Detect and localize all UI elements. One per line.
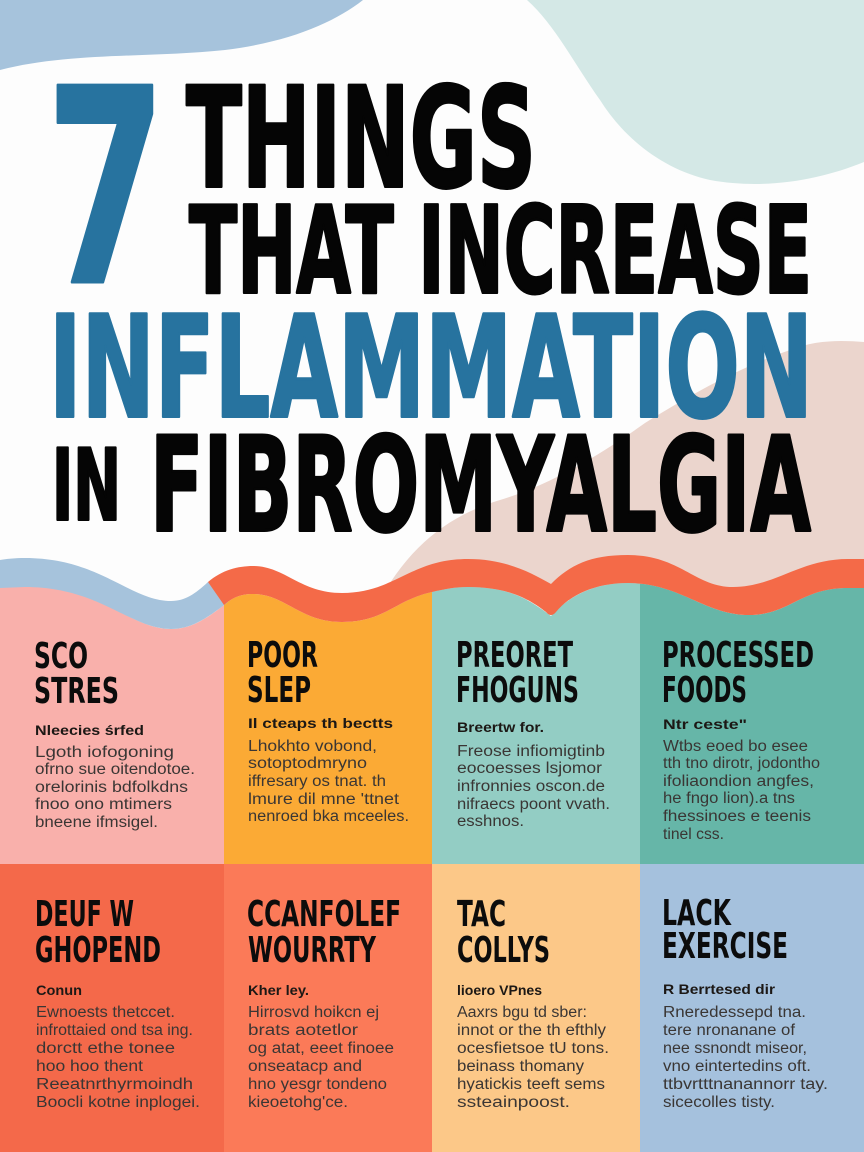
title line: THINGS: THINGS: [186, 58, 536, 220]
body text: nee ssnondt miseor,: [663, 1040, 807, 1057]
heading: CCANFOLEF: [247, 894, 401, 935]
heading: TAC: [457, 894, 506, 935]
body text: hyatickis teeft sems: [457, 1076, 605, 1093]
subheading: Il cteaps th bectts: [248, 715, 393, 731]
body text: beinass thomany: [457, 1058, 584, 1075]
body text: sicecolles tisty.: [663, 1094, 775, 1111]
body text: esshnos.: [457, 813, 524, 830]
body text: [457, 1004, 609, 1111]
body text: bneene ifmsigel.: [35, 814, 158, 831]
body text: Hirrosvd hoikcn ej: [248, 1004, 379, 1021]
body text: Reeatnrthyrmoindh: [36, 1076, 193, 1093]
body text: infronnies oscon.de: [457, 778, 605, 795]
body text: [36, 1004, 200, 1111]
heading: SCO: [34, 636, 88, 677]
body text: lmure dil mne 'ttnet: [248, 791, 400, 808]
panel: Lack Exercise: [640, 864, 864, 1152]
panel: Preoret Fhoguns: [432, 580, 640, 864]
heading: PREORET: [456, 635, 573, 676]
body text: hno yesgr tondeno: [248, 1076, 387, 1093]
subheading: Nleecies śrfed: [35, 722, 144, 738]
body text: [248, 738, 409, 825]
body text: [35, 744, 195, 831]
body text: infrottaied ond tsa ing.: [36, 1022, 193, 1039]
body text: orelorinis bdfolkdns: [35, 779, 188, 796]
body text: Rneredessepd tna.: [663, 1004, 806, 1021]
panel: Deuf W Ghopend: GHOPEND: [35, 930, 161, 971]
body text: Aaxrs bgu td sber:: [457, 1004, 587, 1021]
body text: ocesfietsoe tU tons.: [457, 1040, 609, 1057]
subheading: Kher ley.: [248, 982, 309, 998]
body text: tth tno dirotr, jodontho: [663, 755, 820, 772]
panel: Poor Slep: SLEP: [247, 670, 311, 711]
heading: DEUF W: [35, 894, 134, 935]
body text: fnoo ono mtimers: [35, 796, 172, 813]
heading: LACK: [662, 893, 732, 934]
subheading: Breertw for.: [457, 719, 544, 735]
body text: innot or the th efthly: [457, 1022, 606, 1039]
body text: tere nronanane of: [663, 1022, 796, 1039]
body text: [663, 738, 820, 843]
body text: [457, 743, 610, 830]
panel: Ccanfolef Wourrty: WOURRTY: [248, 930, 377, 971]
wave: blue band: [0, 558, 228, 629]
body text: ifoliaondion angfes,: [663, 773, 814, 790]
body text: dorctt ethe tonee: [36, 1040, 175, 1057]
body text: Lgoth iofogoning: [35, 744, 174, 761]
body text: Wtbs eoed bo esee: [663, 738, 808, 755]
body text: ttbvrtttnanannorr tay.: [663, 1076, 828, 1093]
body text: iffresary os tnat. th: [248, 773, 386, 790]
panel: Ccanfolef Wourrty: [224, 864, 432, 1152]
panel: Processed Foods: FOODS: [662, 670, 747, 711]
body text: he fngo lion).a tns: [663, 790, 795, 807]
panel: Lack Exercise: EXERCISE: [662, 926, 788, 967]
panel: Tac Collys: [432, 864, 640, 1152]
subheading: lioero VPnes: [457, 982, 542, 998]
title line: IN: IN: [52, 430, 121, 544]
wave: orange band: [208, 555, 864, 622]
body text: nifraecs poont vvath.: [457, 796, 610, 813]
subheading: Conun: [36, 982, 82, 998]
body text: Boocli kotne inplogei.: [36, 1094, 200, 1111]
body text: Ewnoests thetccet.: [36, 1004, 175, 1021]
body text: kieoetohg'ce.: [248, 1094, 348, 1111]
heading: POOR: [247, 635, 318, 676]
body text: fhessinoes e teenis: [663, 808, 811, 825]
body text: sotoptodmryno: [248, 755, 367, 772]
body text: hoo hoo thent: [36, 1058, 144, 1075]
subheading: R Berrtesed dir: [663, 981, 776, 997]
body text: onseatacp and: [248, 1058, 362, 1075]
background blob: right peach: [380, 341, 864, 600]
body text: Freose infiomigtinb: [457, 743, 605, 760]
background blob: top-right teal: [527, 0, 864, 184]
panel: Sco Stres: STRES: [34, 671, 119, 712]
background blob: top-left blue: [0, 0, 363, 70]
body text: nenroed bka mceeles.: [248, 808, 409, 825]
body text: [663, 1004, 828, 1111]
panel: Deuf W Ghopend: [0, 864, 225, 1152]
body text: Lhokhto vobond,: [248, 738, 377, 755]
body text: ofrno sue oitendotoe.: [35, 761, 195, 778]
panel: Sco Stres: [0, 580, 225, 864]
title: [46, 31, 813, 562]
body text: ssteainpoost.: [457, 1094, 570, 1111]
big number 7: 7: [46, 31, 166, 346]
body text: [248, 1004, 394, 1111]
panel: Poor Slep: [224, 580, 432, 864]
panel: Processed Foods: [640, 580, 864, 864]
panel: Preoret Fhoguns: FHOGUNS: [456, 670, 579, 711]
body text: vno eintertedins oft.: [663, 1058, 811, 1075]
body text: tinel css.: [663, 826, 724, 843]
subheading: Ntr ceste": [663, 716, 747, 732]
panel: Tac Collys: COLLYS: [457, 930, 550, 971]
body text: brats aotetlor: [248, 1022, 358, 1039]
body text: eocoesses lsjomor: [457, 760, 602, 777]
body text: og atat, eeet finoee: [248, 1040, 394, 1057]
